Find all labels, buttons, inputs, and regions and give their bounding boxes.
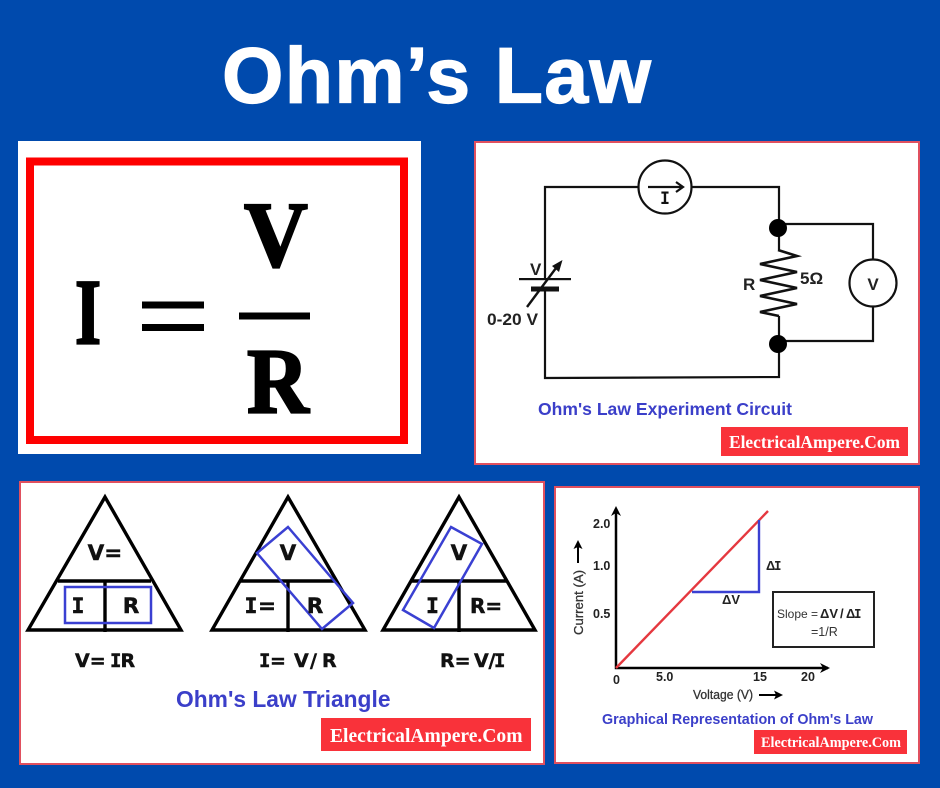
- graph axes: [616, 510, 828, 668]
- y-axis label: Current (A): [571, 570, 586, 635]
- triangle: R = V/I: I: [426, 594, 439, 619]
- triangle caption: Ohm's Law Triangle: [176, 686, 390, 712]
- formula labels: /: [488, 650, 496, 672]
- variable voltage source: [487, 260, 571, 329]
- formula labels: R: [322, 650, 337, 672]
- variable voltage source: 0-20 V: [487, 310, 539, 329]
- slope labels: [722, 558, 782, 607]
- formula labels: I: [494, 650, 505, 672]
- triangle: R = V/I: [383, 497, 535, 632]
- axis tick labels: 0: [613, 673, 620, 687]
- title: Ohm’s Law: [222, 30, 652, 120]
- triangle: I = V/R: =: [258, 594, 276, 619]
- junction nodes: [769, 219, 787, 353]
- graph caption: Graphical Representation of Ohm's Law: [602, 711, 873, 728]
- triangle: R = V/I: V: [451, 541, 468, 566]
- red line: [616, 511, 768, 668]
- formula labels: R=: [440, 650, 471, 672]
- slope box: =1/R: [811, 625, 838, 639]
- slope box: Δ: [846, 606, 855, 621]
- triangle: V = IR: I: [72, 594, 84, 619]
- slope triangle: [692, 520, 759, 592]
- axis tick labels: 1.0: [593, 559, 610, 573]
- resistor labels: 5Ω: [800, 269, 823, 288]
- axis tick labels: 5.0: [656, 670, 673, 684]
- formula labels: I: [110, 650, 121, 672]
- slope box: ΔV: [820, 606, 838, 621]
- slope labels: I: [774, 558, 782, 573]
- triangle: R = V/I: R=: [470, 594, 502, 618]
- brand badge: ElectricalAmpere.Com: [330, 725, 523, 747]
- panel: graph: [555, 487, 919, 763]
- x-axis label: Voltage (V): [693, 687, 753, 702]
- axis tick labels: 15: [753, 670, 767, 684]
- circuit caption: Ohm's Law Experiment Circuit: [538, 399, 792, 419]
- ammeter: I: [660, 189, 670, 208]
- triangle: I = V/R: V: [280, 541, 297, 566]
- circuit wires: [545, 187, 873, 378]
- formula labels: I: [259, 650, 270, 672]
- formula labels: V: [294, 650, 309, 672]
- formula: I = V / R: I: [75, 261, 101, 364]
- formula labels: V=: [75, 650, 106, 672]
- slope box: Slope =: [777, 607, 818, 621]
- formula: I = V / R: R: [247, 330, 310, 433]
- y-axis label: [571, 540, 586, 635]
- panel: ohm's law triangle: [20, 482, 544, 764]
- brand badge: [754, 730, 907, 754]
- panel: formula: [18, 141, 421, 454]
- triangle: I = V/R: I: [245, 594, 257, 619]
- triangle: V = IR: V=: [88, 541, 122, 566]
- axis arrowheads: [611, 506, 830, 673]
- formula labels: /: [310, 650, 317, 672]
- brand badge: ElectricalAmpere.Com: [761, 735, 901, 751]
- panel: experiment circuit: [475, 142, 919, 464]
- formula labels: [75, 650, 505, 672]
- triangle: I = V/R: R: [307, 594, 324, 619]
- formula: I = V / R: V: [244, 183, 308, 287]
- formula: I = V / R: [75, 183, 310, 433]
- axis tick labels: 2.0: [593, 517, 610, 531]
- formula labels: R: [120, 650, 136, 672]
- slope labels: Δ: [766, 558, 775, 573]
- voltmeter: V: [867, 275, 879, 294]
- axis tick labels: [593, 517, 815, 687]
- triangle: V = IR: [28, 497, 181, 632]
- brand badge: [721, 427, 908, 456]
- variable voltage source: V: [530, 260, 542, 279]
- brand badge: [321, 718, 531, 751]
- axis tick labels: 0.5: [593, 607, 610, 621]
- ammeter: [638, 160, 692, 214]
- resistor: [755, 250, 801, 316]
- axis tick labels: 20: [801, 670, 815, 684]
- brand badge: ElectricalAmpere.Com: [729, 432, 900, 452]
- resistor labels: [743, 269, 823, 294]
- formula labels: =: [270, 650, 286, 672]
- slope box: [773, 592, 874, 647]
- formula labels: V: [474, 650, 489, 672]
- triangle: V = IR: R: [123, 594, 140, 619]
- triangle: I = V/R: [212, 497, 365, 632]
- voltmeter: [850, 260, 896, 306]
- slope box: /: [840, 606, 844, 621]
- slope labels: ΔV: [722, 592, 740, 607]
- red frame: [30, 162, 404, 440]
- resistor labels: R: [743, 275, 755, 294]
- slope box: I: [854, 606, 862, 621]
